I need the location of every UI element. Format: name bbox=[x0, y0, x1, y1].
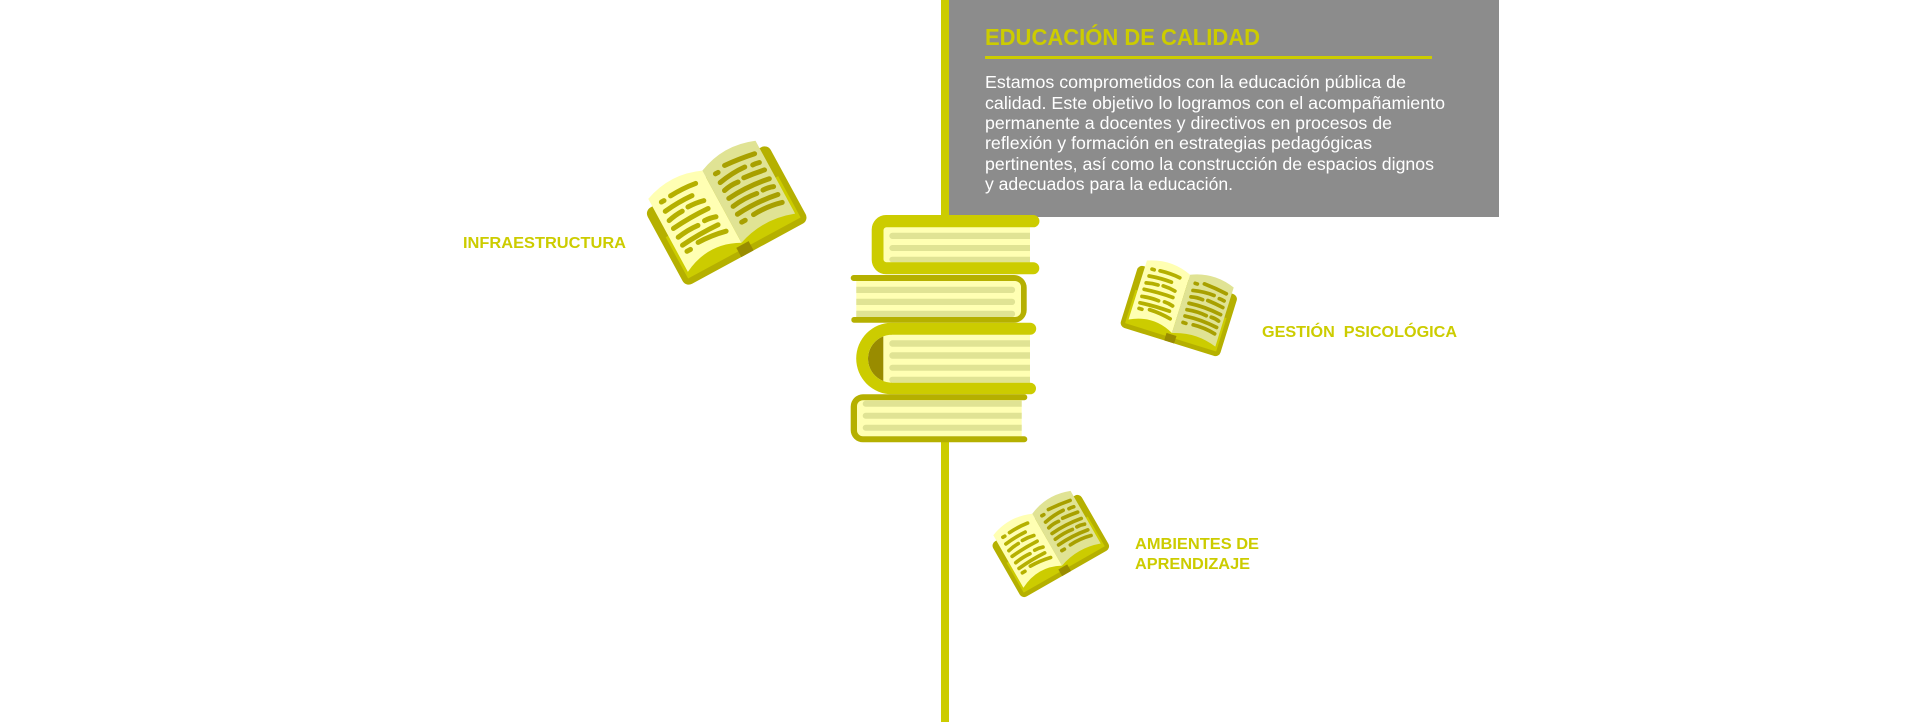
panel heading: EDUCACIÓN DE CALIDAD bbox=[985, 23, 1260, 50]
panel body text: Estamos comprometidos con la educación pública de bbox=[985, 72, 1406, 92]
panel body text: pertinentes, así como la construcción de espacios dignos bbox=[985, 154, 1434, 174]
heading underline bbox=[985, 56, 1432, 59]
book 1 bbox=[872, 215, 1039, 274]
label: ambientes de aprendizaje bbox=[1135, 536, 1259, 573]
label: gestión psicológica: GESTIÓN PSICOLÓGICA bbox=[1262, 322, 1457, 341]
panel body text: reflexión y formación en estrategias pedagógicas bbox=[985, 133, 1372, 153]
vertical timeline line bbox=[941, 0, 949, 722]
icon: open book infraestructura bbox=[638, 131, 809, 287]
book 2 bbox=[851, 275, 1027, 323]
label: infraestructura: INFRAESTRUCTURA bbox=[463, 235, 626, 252]
panel body text: permanente a docentes y directivos en procesos de bbox=[985, 113, 1392, 133]
label: ambientes de aprendizaje: AMBIENTES DE bbox=[1135, 536, 1259, 553]
icon: open book gestión psicológica bbox=[1119, 254, 1241, 357]
panel: educación de calidad bbox=[949, 0, 1499, 217]
panel body text: y adecuados para la educación. bbox=[985, 174, 1233, 194]
icon: stack of books bbox=[851, 215, 1039, 442]
panel body text bbox=[985, 72, 1445, 194]
label: ambientes de aprendizaje: APRENDIZAJE bbox=[1135, 556, 1250, 573]
book 4 bbox=[851, 394, 1027, 442]
icon: open book ambientes de aprendizaje bbox=[986, 484, 1111, 599]
book 3 bbox=[856, 323, 1036, 394]
panel body text: calidad. Este objetivo lo logramos con el acompañamiento bbox=[985, 93, 1445, 113]
